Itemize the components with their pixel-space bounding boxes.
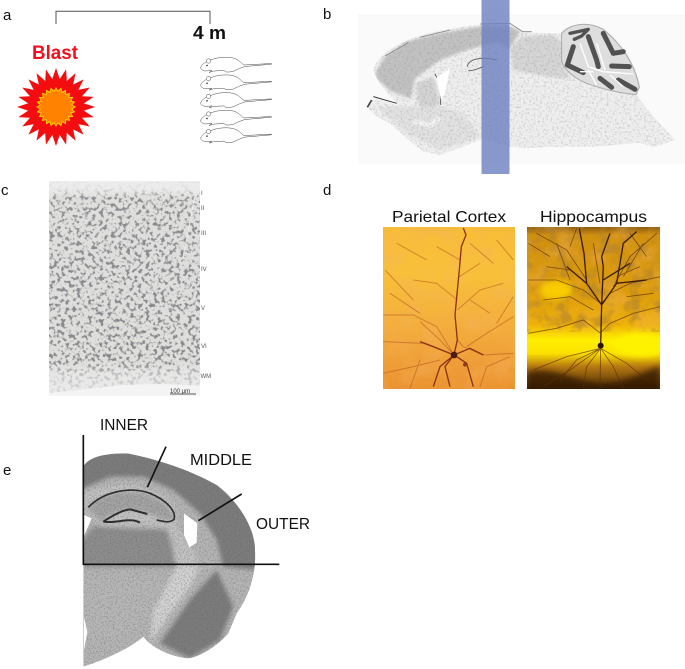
parietal neuron image [383, 227, 515, 389]
axis lines [83, 435, 279, 565]
panel label d: d [323, 182, 331, 199]
panel label e: e [3, 462, 11, 479]
inner pointer [147, 447, 166, 487]
ventricles [84, 513, 197, 650]
coronal section [80, 435, 279, 669]
panel b: sagittal brain section [358, 0, 685, 174]
icon: blast star [15, 66, 97, 148]
layer labels: IV [201, 267, 207, 273]
label: middle: MIDDLE [190, 452, 252, 469]
panel d: neuron micrographs [383, 209, 666, 395]
layer labels: II [201, 206, 205, 212]
heading: parietal cortex: Parietal Cortex [392, 209, 506, 226]
cerebellum [562, 24, 639, 95]
layer labels: WM [200, 374, 211, 380]
label: outer: OUTER [256, 516, 310, 533]
panel c: cortical layers micrograph [49, 181, 211, 396]
brain section [363, 20, 680, 160]
outer pointer [198, 494, 242, 521]
layer labels: V [201, 306, 205, 312]
layer labels: I [201, 191, 203, 197]
layer labels [200, 191, 211, 380]
hippocampal cell layers [88, 490, 174, 523]
time label: 4 m [193, 23, 226, 43]
blast heading: Blast [32, 43, 79, 64]
panel a: blast timeline [15, 11, 272, 148]
blue slice marker [482, 0, 510, 174]
section background [358, 14, 685, 164]
hippocampal neuron image [527, 227, 666, 395]
icon: five mice [201, 57, 272, 143]
hippocampus and midline details [367, 23, 532, 107]
layer labels: VI [201, 344, 207, 350]
panel label b: b [323, 6, 331, 23]
panel label c: c [1, 182, 9, 199]
timeline bracket [56, 11, 210, 24]
layer labels: III [201, 231, 206, 237]
micrograph [49, 181, 200, 396]
panel label a: a [3, 7, 12, 24]
scale bar: 100 µm [170, 389, 190, 395]
heading: hippocampus: Hippocampus [540, 209, 647, 226]
panel e: coronal brain section [80, 417, 310, 669]
label: inner: INNER [100, 417, 148, 434]
